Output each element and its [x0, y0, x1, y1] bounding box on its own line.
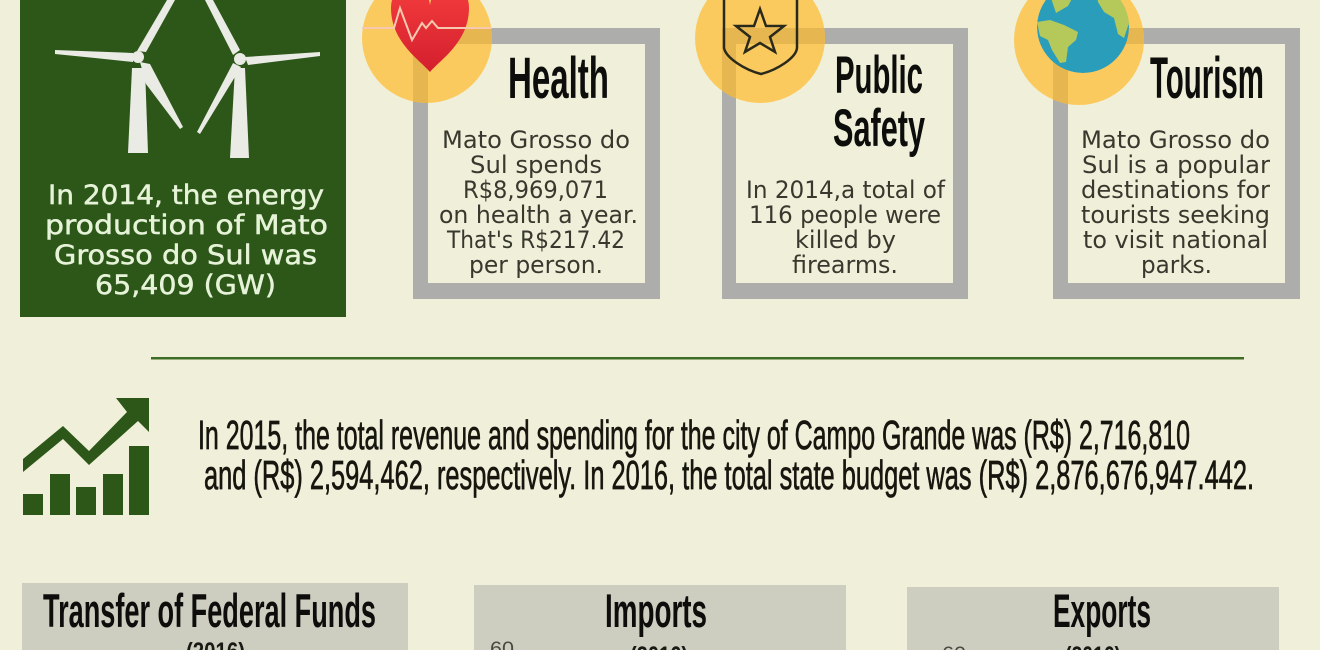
- energy text: In 2014, the energy: [48, 180, 324, 211]
- health text: That's R$217.42: [446, 226, 625, 254]
- panel: exports: [907, 584, 1279, 650]
- heading: exports: Exports: [1053, 584, 1151, 637]
- heading: health: Health: [508, 46, 609, 111]
- heading: public safety: [833, 46, 925, 158]
- panel: transfer of federal funds: [22, 583, 408, 650]
- health text: Sul spends: [470, 151, 602, 179]
- tourism text: destinations for: [1081, 176, 1270, 204]
- energy text: 65,409 (GW): [95, 270, 276, 301]
- tourism text: tourists seeking: [1081, 201, 1270, 229]
- health text: R$8,969,071: [463, 176, 608, 204]
- heading: transfer of federal funds: Transfer of Federal Funds: [43, 584, 376, 637]
- health text: on health a year.: [439, 201, 638, 229]
- panel: public safety: [695, 0, 968, 299]
- panel: imports: [474, 584, 846, 650]
- icon: shield with star: [724, 0, 797, 74]
- icon: growth chart: [23, 398, 149, 515]
- public safety text: 116 people were: [749, 201, 941, 229]
- health text: [439, 126, 638, 279]
- energy text: Grosso do Sul was: [54, 240, 317, 271]
- public safety text: firearms.: [792, 251, 898, 279]
- panel: energy production: [20, 0, 346, 317]
- heading: public safety: Public: [835, 46, 923, 105]
- panel: tourism: [1014, 0, 1300, 299]
- tourism text: to visit national: [1083, 226, 1268, 254]
- panel: health: [362, 0, 660, 299]
- energy text: [45, 180, 328, 301]
- icon: globe: [1037, 0, 1130, 73]
- tourism text: parks.: [1141, 251, 1212, 279]
- heading: imports: Imports: [605, 584, 707, 637]
- tourism text: Sul is a popular: [1082, 151, 1270, 179]
- public safety text: [746, 176, 946, 279]
- heading: public safety: Safety: [833, 99, 925, 158]
- icon: right wind turbine: [197, 0, 320, 158]
- tourism text: Mato Grosso do: [1081, 126, 1270, 154]
- health text: per person.: [469, 251, 603, 279]
- tourism text: [1081, 126, 1270, 279]
- budget text: [198, 412, 1254, 498]
- public safety text: killed by: [795, 226, 896, 254]
- public safety text: In 2014,a total of: [746, 176, 946, 204]
- health text: Mato Grosso do: [442, 126, 630, 154]
- icon: left wind turbine: [55, 0, 183, 153]
- icon: heart: [362, 0, 492, 72]
- energy text: production of Mato: [45, 210, 328, 241]
